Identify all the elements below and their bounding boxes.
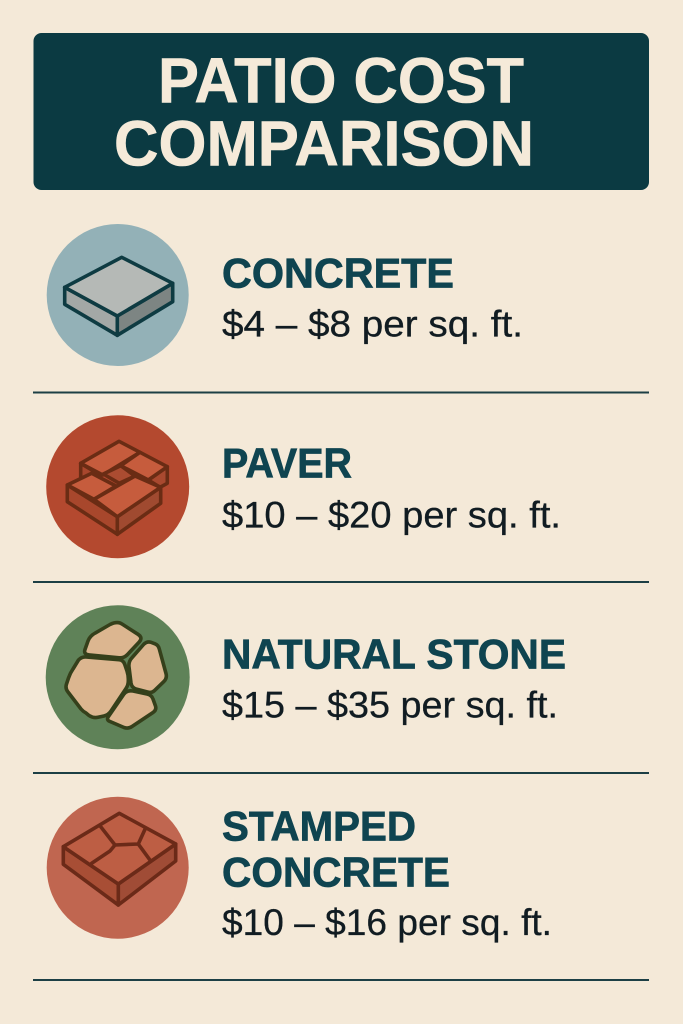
price: paver: $10 – $20 per sq. ft. <box>222 495 561 536</box>
row: natural stone <box>46 605 566 749</box>
heading: stamped concrete <box>222 803 450 896</box>
title banner <box>34 33 649 190</box>
price: natural stone: $15 – $35 per sq. ft. <box>222 685 558 726</box>
icon: paver bricks <box>46 415 189 558</box>
heading: concrete: CONCRETE <box>222 249 454 296</box>
icon: natural stones <box>46 605 190 749</box>
title: PATIO COST <box>158 44 524 116</box>
heading: stamped concrete: CONCRETE <box>222 849 450 896</box>
heading: paver: PAVER <box>222 440 352 487</box>
price: stamped concrete: $10 – $16 per sq. ft. <box>222 902 552 943</box>
icon: stamped concrete slab <box>47 797 189 939</box>
row: stamped concrete <box>47 797 552 943</box>
heading: stamped concrete: STAMPED <box>222 803 416 850</box>
price: concrete: $4 – $8 per sq. ft. <box>222 304 523 345</box>
row: paver <box>46 415 561 558</box>
row: concrete <box>47 224 523 366</box>
icon: concrete slab <box>47 224 189 366</box>
heading: natural stone: NATURAL STONE <box>222 630 566 677</box>
title: COMPARISON <box>114 108 534 180</box>
title <box>114 44 534 180</box>
